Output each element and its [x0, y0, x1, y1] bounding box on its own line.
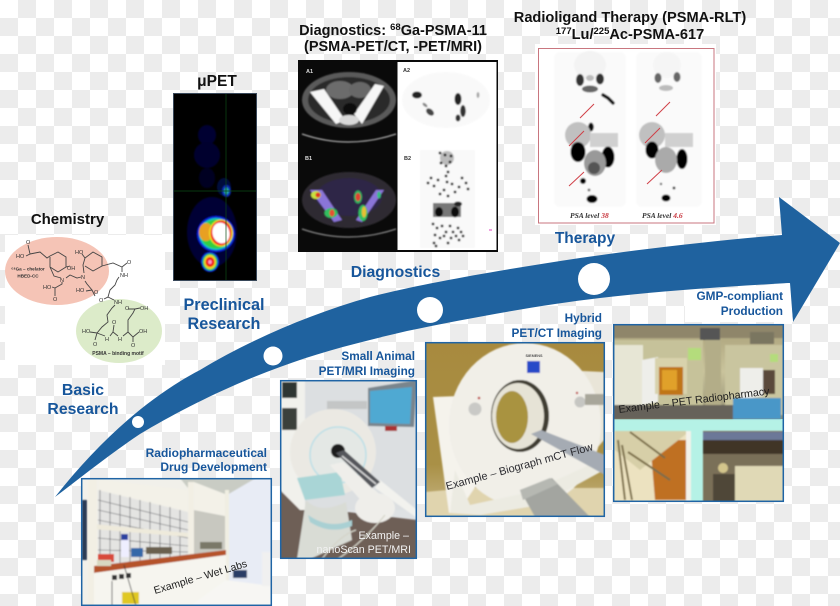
- panel: chemistry structure: [5, 235, 165, 365]
- heading: therapy: Therapy: [555, 230, 616, 247]
- red arrows: [569, 102, 670, 186]
- photo border: wet labs: [82, 479, 271, 605]
- atom labels: HO: [43, 285, 52, 291]
- heading: diagnostics tracer: Ga-PSMA-11: [401, 23, 487, 39]
- example label: Example – PET Radiopharmacy: [618, 385, 771, 416]
- photo border: nanoScan: [281, 381, 416, 558]
- atom labels: O: [99, 298, 104, 304]
- fused slice B1: [302, 172, 396, 237]
- example label: Example – Biograph mCT Flow: [445, 441, 594, 493]
- atom labels: O: [127, 260, 132, 266]
- heading: basic research: Research: [47, 401, 119, 418]
- atom labels: O: [93, 342, 98, 348]
- image: diagnostic PET/CT: B2: [404, 156, 411, 162]
- image: diagnostic PET/CT: [298, 60, 498, 252]
- heading: radioligand therapy: Radioligand Therapy (PSMA-RLT): [514, 10, 746, 26]
- example label: Example – Wet Labs: [152, 558, 249, 597]
- atom labels: H: [118, 337, 122, 343]
- atom labels: HO: [76, 288, 85, 294]
- milestone dot: preclinical: [264, 346, 282, 366]
- example label: nanoScan PET/MRI: [317, 544, 411, 556]
- atom labels: O: [125, 306, 130, 312]
- left body: [554, 52, 626, 207]
- caption: GMP production: GMP-compliant: [696, 289, 783, 303]
- atom labels: OH: [67, 266, 75, 272]
- caption: hybrid imaging: PET/CT Imaging: [512, 326, 602, 340]
- milestone dot: therapy: [578, 263, 610, 295]
- binding motif ellipse: [76, 299, 162, 363]
- atom labels: HO: [75, 250, 84, 256]
- heading: preclinical research: Research: [188, 315, 260, 333]
- heading: radioligand therapy: 177: [556, 26, 572, 37]
- heading: preclinical research: Preclinical: [184, 296, 264, 314]
- photo border: PET/CT: [426, 343, 604, 516]
- milestone dot: basic research: [132, 416, 144, 428]
- right body: [636, 52, 702, 207]
- image: radioligand therapy scans: [535, 44, 716, 225]
- heading: radioligand therapy: Lu/: [572, 27, 594, 43]
- atom labels: O: [112, 320, 117, 326]
- atom labels: NH: [114, 300, 122, 306]
- heading: diagnostics: Diagnostics: [351, 264, 440, 281]
- photo: nanoScan PET/MRI: [280, 380, 417, 559]
- heading: radioligand therapy: Ac-PSMA-617: [609, 27, 704, 43]
- atom labels: O: [26, 240, 31, 246]
- molecule skeleton: [26, 245, 140, 342]
- caption: radiopharmaceutical drug development: Radiopharmaceutical: [146, 446, 267, 460]
- heading: micro PET: μPET: [197, 73, 237, 90]
- heading: chemistry: Chemistry: [31, 211, 105, 228]
- heading: diagnostics tracer: 68: [390, 22, 401, 33]
- panel: chemistry structure: HBED-CC: [17, 274, 39, 278]
- atom labels: O: [131, 343, 136, 349]
- panel letters: A1: [306, 69, 313, 75]
- atom labels: NH: [120, 273, 128, 279]
- caption: small animal imaging: Small Animal: [341, 349, 415, 363]
- brand label: SIEMENS: [525, 354, 543, 358]
- heading: radioligand therapy: 225: [594, 26, 610, 37]
- whole-body PET B2: [425, 150, 471, 248]
- atom labels: OH: [140, 306, 148, 312]
- image: micro PET scan: [173, 93, 257, 281]
- atom labels: O: [53, 297, 58, 303]
- binding motif label: PSMA – binding motif: [92, 351, 144, 357]
- example label: Example –: [358, 530, 409, 542]
- photo: wet labs: [81, 478, 272, 606]
- image: diagnostic PET/CT: A2: [403, 68, 410, 74]
- caption: hybrid imaging: Hybrid: [565, 311, 602, 325]
- caption: small animal imaging: PET/MRI Imaging: [319, 364, 415, 378]
- atom labels: HO: [16, 254, 25, 260]
- crosshair: [173, 93, 257, 281]
- atom labels: N: [81, 275, 85, 281]
- atom labels: N: [60, 278, 64, 284]
- caption: radiopharmaceutical drug development: Drug Development: [160, 460, 267, 474]
- heading: diagnostics tracer: (PSMA-PET/CT, -PET/MRI): [304, 39, 482, 55]
- atom labels: O: [94, 290, 99, 296]
- PET slice A2: [410, 90, 480, 123]
- milestone dot: diagnostics: [417, 297, 443, 323]
- photo: PET radiopharmacy: [613, 324, 784, 502]
- image: radioligand therapy scans: PSA level 4.6: [642, 211, 683, 220]
- heading: basic research: Basic: [62, 382, 104, 399]
- atom labels: HO: [82, 329, 91, 335]
- image: diagnostic PET/CT: B1: [305, 156, 312, 162]
- chelator ellipse: [5, 237, 109, 305]
- photo border: radiopharmacy: [614, 325, 783, 501]
- atom labels: OH: [139, 329, 147, 335]
- caption: GMP production: Production: [721, 304, 783, 318]
- photo: PET/CT scanner: [425, 342, 605, 517]
- progress arrow: [55, 197, 840, 497]
- chelator label: ⁶⁸Ga – chelator: [11, 266, 45, 272]
- caption: GMP production: [685, 283, 793, 322]
- CT slice A1: [302, 72, 396, 142]
- heading: diagnostics tracer: Diagnostics:: [299, 23, 390, 39]
- PSA labels: PSA level 38: [570, 211, 609, 220]
- atom labels: [16, 240, 148, 349]
- atom labels: H: [105, 337, 109, 343]
